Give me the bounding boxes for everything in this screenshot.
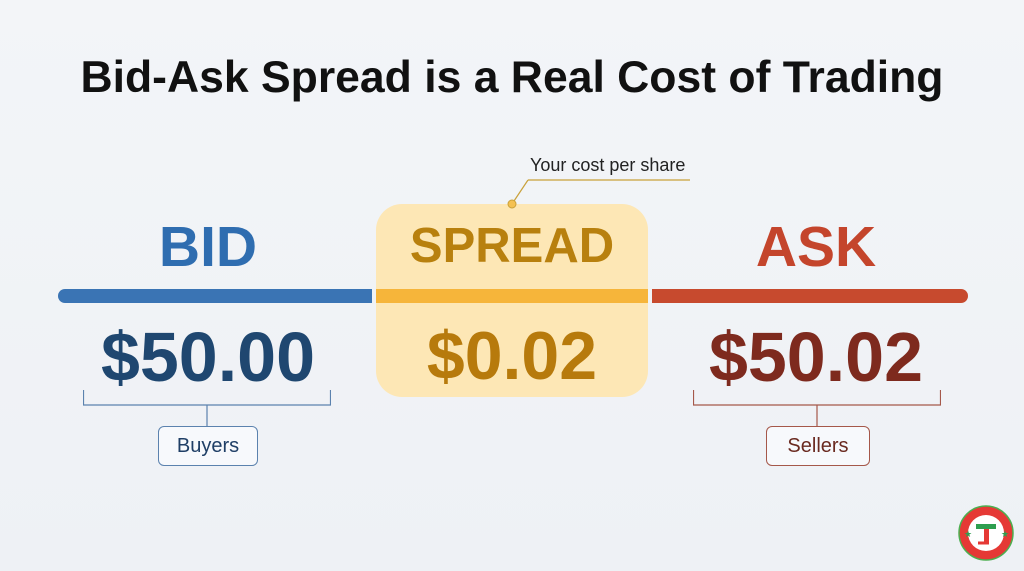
icon: logo	[958, 505, 1014, 561]
bar: bid line	[58, 289, 372, 303]
label: Buyers	[158, 426, 258, 466]
title: Bid-Ask Spread is a Real Cost of Trading	[80, 53, 944, 102]
bracket: sellers	[693, 390, 941, 426]
value: ask price: $50.02	[709, 318, 923, 396]
panel: spread box	[376, 204, 648, 397]
heading: BID: BID	[159, 215, 257, 279]
label: Sellers	[766, 426, 870, 466]
callout: Your cost per share	[530, 155, 685, 175]
callout	[508, 155, 690, 208]
label: Buyers: Buyers	[177, 435, 239, 457]
bar: ask line	[652, 289, 968, 303]
value: spread: $0.02	[427, 318, 597, 394]
heading: SPREAD: SPREAD	[410, 219, 614, 273]
bar: spread line	[376, 289, 648, 303]
icon: logo: ★	[1001, 529, 1009, 539]
value: bid price: $50.00	[101, 318, 315, 396]
icon: logo: ★	[964, 529, 972, 539]
label: Sellers: Sellers	[787, 435, 849, 457]
heading: ASK: ASK	[756, 215, 876, 279]
bracket: buyers	[83, 390, 331, 426]
